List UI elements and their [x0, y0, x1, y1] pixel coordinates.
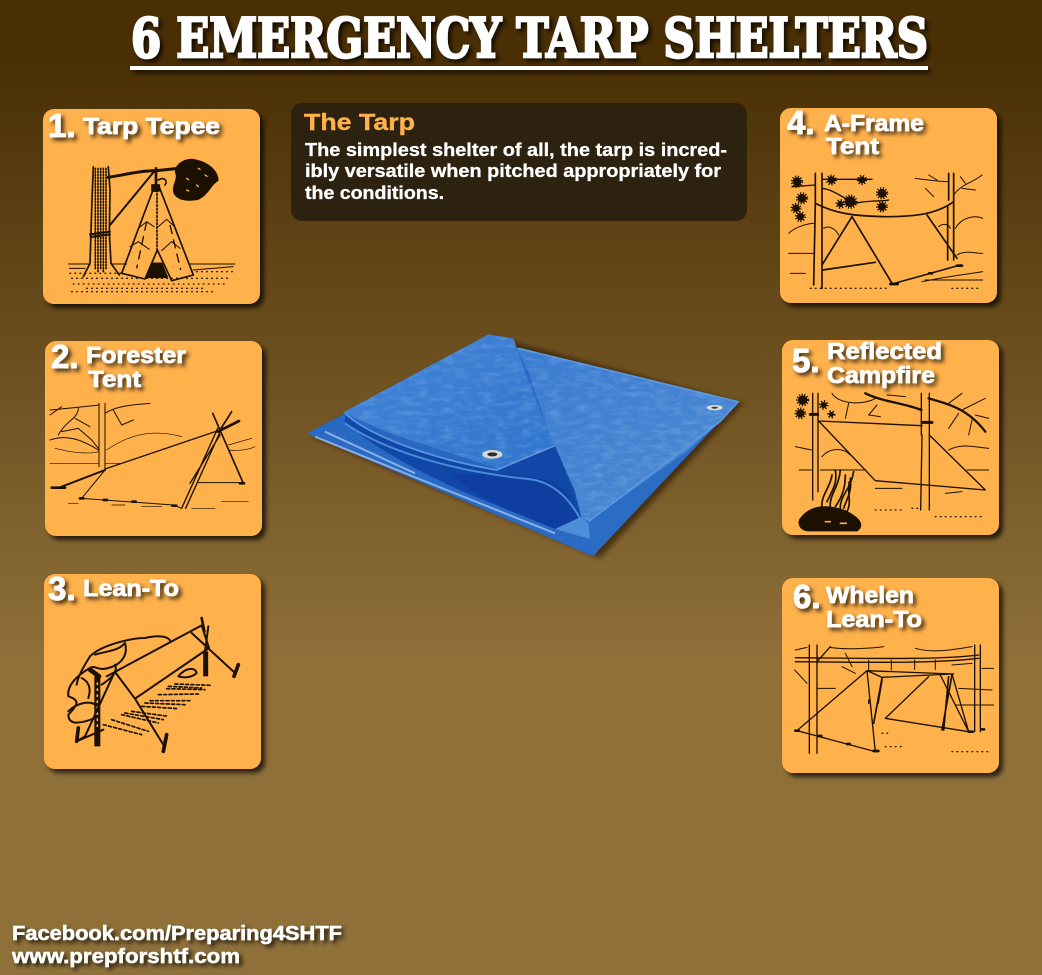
illustration: reflected campfire [795, 393, 989, 530]
label: Forester Tent [86, 342, 186, 392]
label: Lean-To: Lean-To [83, 575, 179, 601]
label: Whelen Lean-To: Lean-To [826, 606, 922, 632]
label: A-Frame Tent [824, 110, 924, 159]
number 1: 1. [48, 107, 76, 144]
number 2: 2. [51, 338, 79, 375]
illustration: forester tent [50, 403, 255, 508]
number 4: 4. [787, 104, 815, 141]
illustration: whelen lean-to [795, 645, 994, 753]
label: Whelen Lean-To [826, 582, 922, 632]
panel: 6 Whelen Lean-To [782, 578, 999, 773]
label: Reflected Campfire: Reflected [827, 338, 942, 364]
footer links [11, 923, 342, 968]
footer links: Facebook.com/Preparing4SHTF [12, 923, 342, 945]
label: Tarp Tepee: Tarp Tepee [83, 113, 220, 139]
label: Forester Tent: Tent [88, 366, 141, 392]
description text [305, 140, 727, 203]
panel: 3 Lean-To [44, 570, 261, 769]
panel: 2 Forester Tent [45, 338, 262, 536]
illustration: lean-to [68, 618, 238, 751]
description text: The simplest shelter of all, the tarp is incred- [305, 140, 727, 160]
label: Reflected Campfire [827, 338, 942, 388]
label: Forester Tent: Forester [86, 342, 186, 368]
tarp image [307, 334, 743, 558]
description text: ibly versatile when pitched appropriately for [305, 161, 721, 181]
panel: 4 A-Frame Tent [780, 104, 997, 303]
description text: the conditions. [305, 183, 444, 203]
label: Whelen Lean-To: Whelen [826, 582, 914, 608]
illustration: a-frame tent [789, 173, 983, 288]
label: Reflected Campfire: Campfire [827, 362, 935, 388]
heading: The Tarp: The Tarp [304, 109, 415, 135]
illustration: tarp tepee [68, 161, 235, 292]
footer links: www.prepforshtf.com [11, 946, 240, 968]
label: A-Frame Tent: Tent [826, 133, 879, 159]
number 6: 6. [793, 578, 821, 615]
grommet: right [707, 405, 723, 410]
number 5: 5. [792, 342, 820, 379]
label: A-Frame Tent: A-Frame [824, 110, 924, 136]
grommet: front [482, 450, 502, 459]
tarp surface texture [343, 334, 738, 522]
panel: 5 Reflected Campfire [782, 338, 999, 535]
number 3: 3. [48, 570, 76, 607]
panel: The Tarp description [291, 103, 747, 221]
panel: 1 Tarp Tepee [43, 107, 260, 304]
